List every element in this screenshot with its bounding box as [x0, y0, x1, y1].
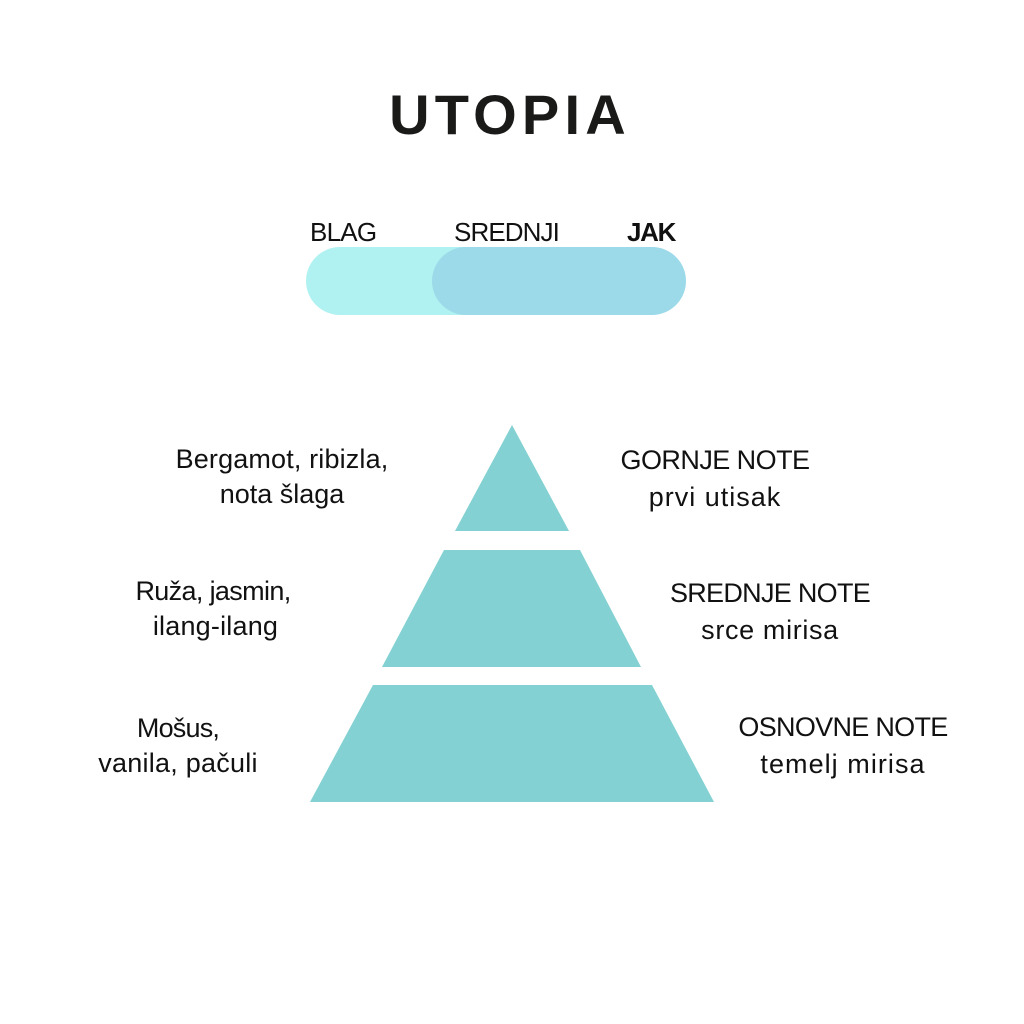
text: middle notes — [670, 578, 870, 645]
scale bar: light — [306, 247, 506, 315]
text: top notes — [621, 445, 809, 512]
text: top notes: prvi utisak — [649, 482, 781, 512]
pyramid — [310, 425, 714, 802]
strength scale — [306, 217, 686, 315]
text: base ingredients — [98, 713, 258, 778]
text: top ingredients — [176, 444, 388, 509]
pyramid top tier — [455, 425, 569, 531]
text: middle notes: srce mirisa — [701, 615, 839, 645]
text: base ingredients: vanila, pačuli — [98, 748, 258, 778]
text: base notes — [738, 712, 948, 779]
pyramid middle tier — [382, 550, 641, 667]
text: top notes: GORNJE NOTE — [621, 445, 809, 475]
text: middle notes: SREDNJE NOTE — [670, 578, 870, 608]
label: blag: BLAG — [310, 217, 376, 247]
text: middle ingredients: ilang-ilang — [153, 611, 278, 641]
text: base notes: temelj mirisa — [760, 749, 926, 779]
text: top ingredients: nota šlaga — [220, 479, 344, 509]
scale bar: strong — [432, 247, 686, 315]
text: base ingredients: Mošus, — [137, 713, 219, 743]
text: top ingredients: Bergamot, ribizla, — [176, 444, 388, 474]
text: base notes: OSNOVNE NOTE — [738, 712, 948, 742]
title: UTOPIA — [389, 83, 631, 146]
text: middle ingredients — [135, 576, 291, 641]
pyramid base tier — [310, 685, 714, 802]
text: middle ingredients: Ruža, jasmin, — [135, 576, 291, 606]
label: srednji: SREDNJI — [454, 217, 559, 247]
label: jak: JAK — [627, 217, 675, 247]
